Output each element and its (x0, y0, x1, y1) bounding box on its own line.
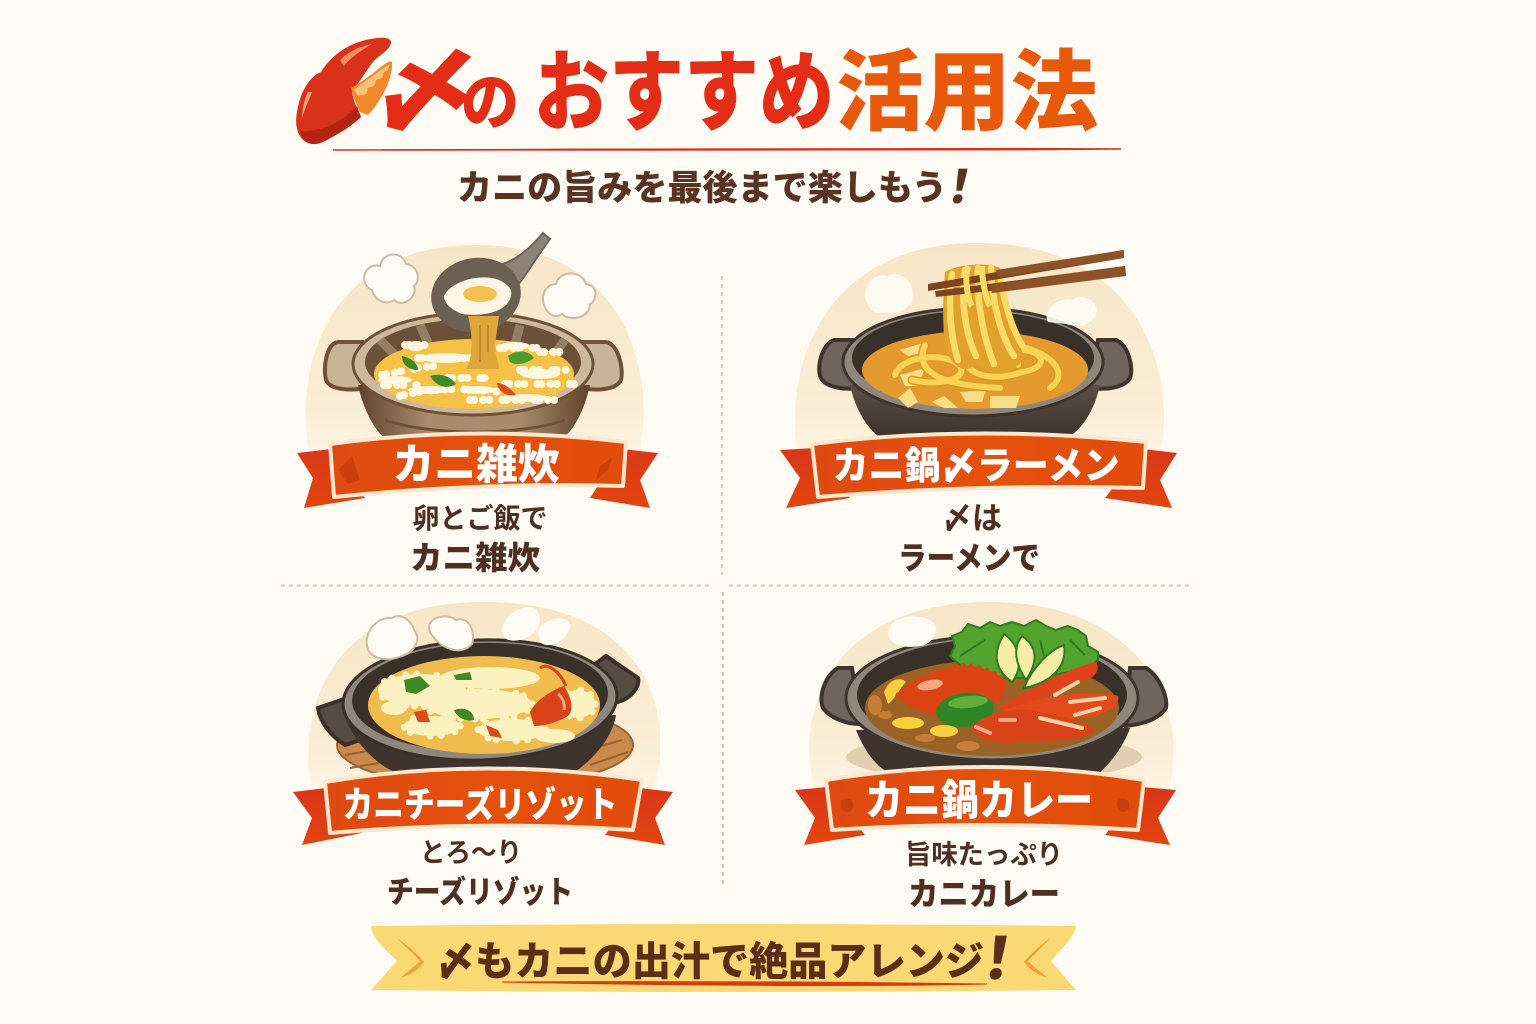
ribbon (780, 433, 1177, 508)
panel: crab hot pot ramen (780, 243, 1177, 576)
caption: 卵とご飯で (412, 502, 548, 534)
risotto (368, 656, 600, 754)
backdrop circle (795, 243, 1164, 465)
curry soup (862, 331, 1088, 409)
ribbon: カニ鍋〆ラーメン (832, 446, 1120, 488)
caption: カニ雑炊 (410, 540, 540, 576)
iron pot (318, 635, 638, 774)
footer banner (371, 924, 1076, 992)
caption (410, 502, 548, 576)
banner text: 〆もカニの出汁で絶品アレンジ (436, 940, 984, 984)
icon: crab claw (296, 38, 392, 144)
banner text: ！ (964, 927, 1031, 992)
panel: crab zosui (297, 233, 658, 576)
caption: 旨味たっぷり (905, 840, 1063, 870)
underline (502, 982, 987, 985)
noodles and chopsticks (895, 250, 1126, 388)
steam (888, 617, 936, 647)
rice porridge (374, 339, 580, 409)
caption: カニカレー (908, 876, 1060, 912)
steam clouds (865, 274, 1097, 326)
backdrop circle (809, 602, 1174, 800)
subtitle: カニの旨みを最後まで楽しもう (457, 169, 947, 208)
clay pot (325, 313, 622, 442)
caption (387, 838, 573, 910)
ribbon (293, 768, 673, 845)
panel: crab cheese risotto (293, 602, 673, 910)
crab claw (530, 686, 571, 726)
chevrons (397, 938, 1050, 977)
banner shape (371, 924, 1076, 992)
caption (905, 840, 1063, 912)
caption: 〆は (942, 501, 1002, 536)
crab legs (972, 662, 1118, 743)
shadow (846, 733, 1142, 781)
backdrop circle (306, 245, 643, 465)
ribbon (297, 433, 658, 508)
steam clouds (367, 607, 570, 659)
caption (898, 501, 1040, 576)
iron pot (821, 636, 1166, 774)
dividers (281, 276, 1191, 885)
iron pot (819, 308, 1131, 436)
ribbon: カニ鍋カレー (865, 777, 1093, 824)
title text: red part (372, 42, 834, 142)
title text: red part: おすすめ (534, 43, 834, 142)
ribbon (795, 767, 1176, 845)
ribbon: カニ雑炊 (392, 441, 560, 488)
backdrop circle (309, 602, 660, 800)
title (296, 38, 1098, 144)
banner text (436, 927, 1031, 992)
title underline (333, 148, 1121, 151)
title text: red part: の (461, 69, 519, 138)
subtitle (457, 161, 987, 213)
lettuce and cabbage (950, 620, 1098, 688)
title text: orange part: 活用法 (836, 43, 1098, 142)
wooden board (337, 703, 633, 787)
steam clouds (364, 254, 596, 318)
curry (865, 660, 1119, 756)
ladle (425, 233, 550, 369)
caption: チーズリゾット (387, 875, 573, 910)
title text: red part: 〆 (372, 42, 481, 142)
panel: crab hot pot curry (795, 602, 1176, 912)
ribbon: カニチーズリゾット (342, 784, 618, 825)
crab body (898, 666, 1006, 730)
caption: ラーメンで (898, 540, 1040, 576)
caption: とろ〜り (420, 838, 522, 868)
subtitle: ！ (932, 161, 987, 213)
